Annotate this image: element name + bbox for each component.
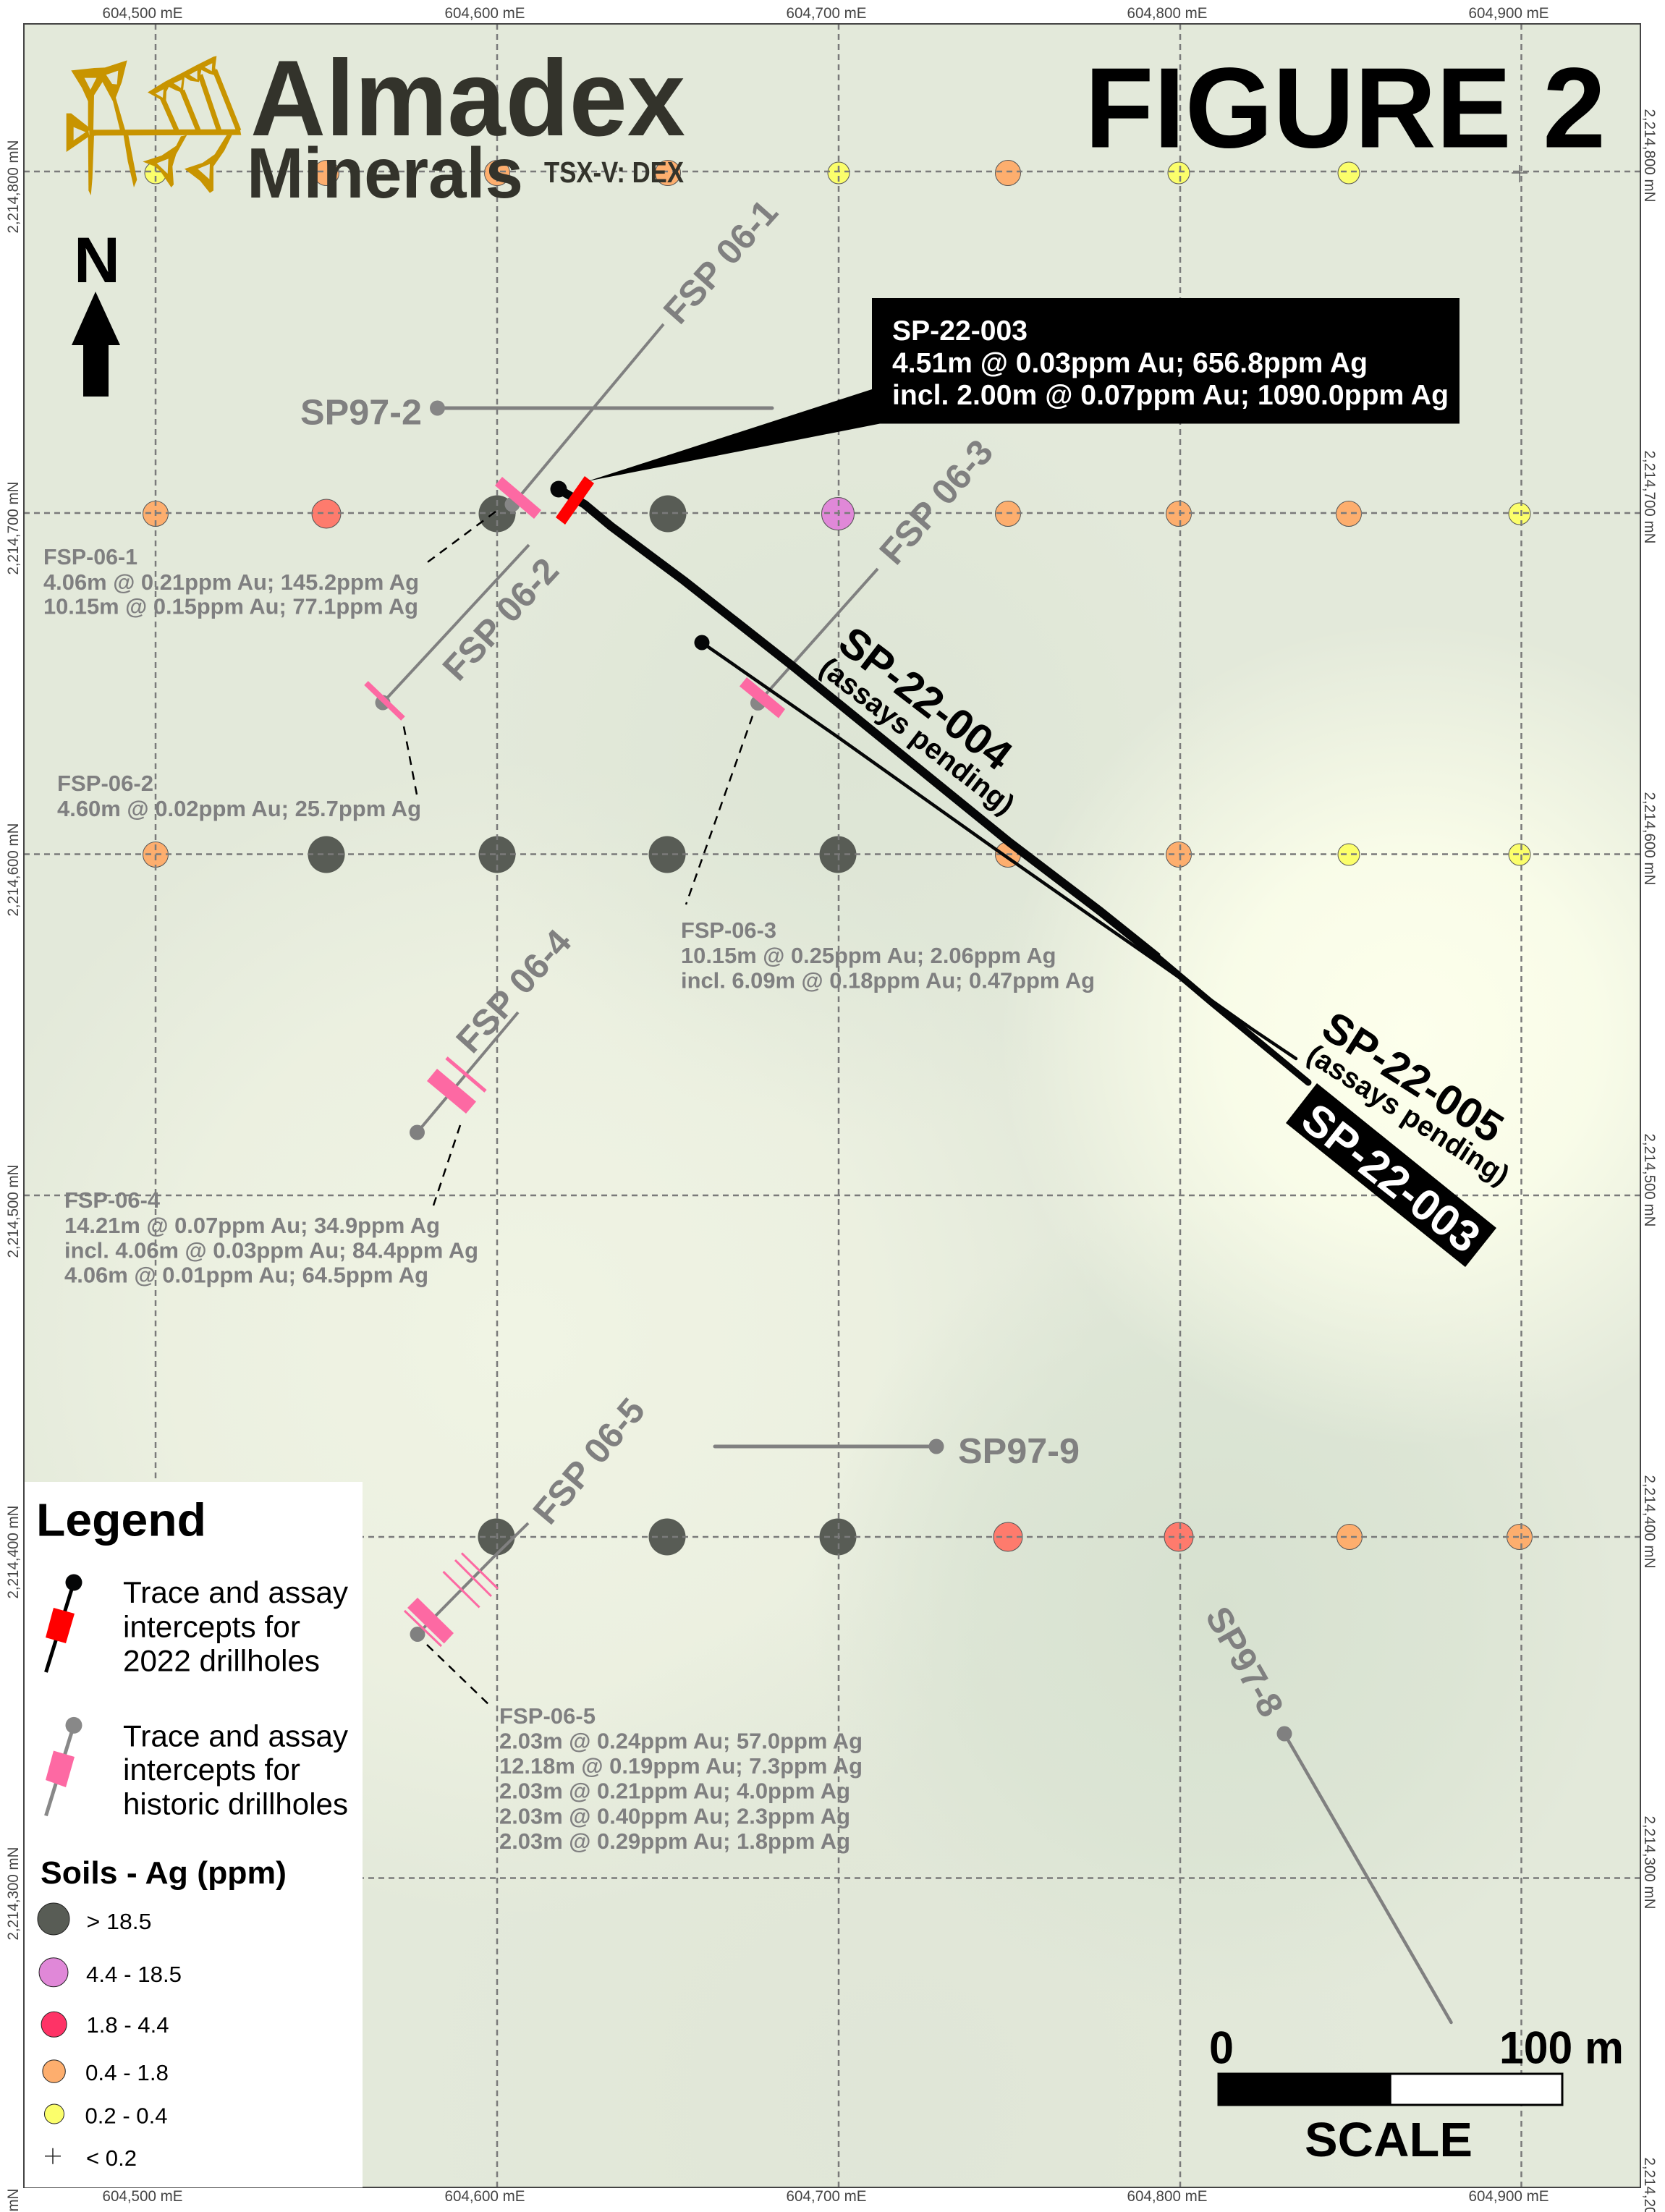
text: FSP-06-5 intercepts: 2.03m @ 0.29ppm Au; 1.8ppm Ag <box>499 1829 850 1854</box>
label: SP-22-004: SP-22-004 <box>830 617 1021 779</box>
logo wordmark: Minerals: Minerals <box>247 133 523 213</box>
legend item: greater than 18.5 <box>38 1903 152 1935</box>
text: FSP-06-5 intercepts: FSP-06-5 <box>499 1704 596 1729</box>
drillhole FSP 06-2 <box>366 545 529 794</box>
text: FSP-06-1 intercepts: 10.15m @ 0.15ppm Au; 77.1ppm Ag <box>43 595 418 619</box>
legend text: historic drillholes: Trace and assay <box>123 1719 348 1753</box>
callout: SP-22-003 assays <box>588 298 1459 481</box>
scale bar <box>1209 2023 1624 2167</box>
bottom axis labels: 604,800 mE <box>1127 2188 1207 2205</box>
legend icon: 2022 drillhole <box>46 1575 82 1672</box>
text: FSP-06-5 intercepts <box>499 1704 863 1854</box>
legend item: 0.2 to 0.4: 0.2 - 0.4 <box>85 2103 168 2129</box>
left axis labels <box>5 140 22 2212</box>
text: FSP-06-5 intercepts: 2.03m @ 0.40ppm Au; 2.3ppm Ag <box>499 1805 850 1829</box>
callout: SP-22-003 assays: 4.51m @ 0.03ppm Au; 656.8ppm Ag <box>892 347 1368 379</box>
legend item: 0.4 to 1.8: 0.4 - 1.8 <box>85 2060 169 2085</box>
text: FSP-06-3 intercepts: 10.15m @ 0.25ppm Au; 2.06ppm Ag <box>681 944 1056 968</box>
top axis labels <box>103 5 1549 22</box>
label: SP-22-003 on black box: SP-22-003 <box>1293 1093 1489 1262</box>
left axis labels: 2,214,800 mN <box>5 140 22 233</box>
left axis labels: 2,214,600 mN <box>5 823 22 916</box>
text: FSP-06-4 intercepts: FSP-06-4 <box>64 1188 160 1213</box>
drillhole FSP 06-5 <box>404 1523 528 1707</box>
drillhole SP-22-003 and SP-22-004 <box>550 476 1308 1082</box>
soil samples row 2,214,700 mN <box>143 495 1530 533</box>
legend item: greater than 18.5: > 18.5 <box>87 1909 152 1934</box>
text: FSP-06-4 intercepts: 14.21m @ 0.07ppm Au; 34.9ppm Ag <box>64 1213 440 1238</box>
label: FSP 06-1: FSP 06-1 <box>656 192 786 331</box>
legend item: less than 0.2: < 0.2 <box>86 2145 137 2171</box>
drillhole FSP 06-4 <box>410 1012 518 1205</box>
drillhole FSP 06-3 <box>686 569 878 904</box>
scale caption: SCALE <box>1305 2113 1473 2167</box>
left axis labels: 2,214,300 mN <box>5 1847 22 1941</box>
text: FSP-06-1 intercepts: FSP-06-1 <box>43 545 137 569</box>
legend item: less than 0.2 <box>45 2145 137 2171</box>
text: FSP-06-5 intercepts: 2.03m @ 0.24ppm Au; 57.0ppm Ag <box>499 1729 863 1754</box>
legend item: 4.4 to 18.5 <box>39 1958 182 1987</box>
legend text: historic drillholes: historic drillholes <box>123 1787 348 1821</box>
text: FSP-06-2 intercepts <box>57 771 421 821</box>
text: FSP-06-1 intercepts <box>43 545 419 619</box>
text: FSP-06-5 intercepts: 2.03m @ 0.21ppm Au; 4.0ppm Ag <box>499 1779 850 1804</box>
bottom axis labels: 604,600 mE <box>444 2188 525 2205</box>
text: FSP-06-3 intercepts <box>681 918 1095 993</box>
icon: Almadex cuneiform logo <box>67 56 241 195</box>
drillhole FSP 06-1 <box>423 324 664 566</box>
north label: N <box>74 224 120 296</box>
legend icon: historic drillhole <box>46 1717 82 1815</box>
legend text: 2022 drillholes: Trace and assay <box>123 1575 348 1609</box>
top axis labels: 604,500 mE <box>103 5 182 22</box>
drillhole SP97-2 <box>430 401 772 415</box>
panel: legend <box>25 1482 363 2187</box>
left axis labels: 2,214,700 mN <box>5 482 22 575</box>
legend text: 2022 drillholes: intercepts for <box>123 1610 300 1644</box>
text: FSP-06-3 intercepts: incl. 6.09m @ 0.18ppm Au; 0.47ppm Ag <box>681 969 1095 993</box>
soil samples row 2,214,800 mN <box>145 161 1528 185</box>
right axis labels: 2,214,400 mN <box>1641 1475 1658 1569</box>
legend text: 2022 drillholes <box>123 1575 348 1678</box>
text: FSP-06-4 intercepts <box>64 1188 478 1288</box>
right axis labels: 2,214,800 mN <box>1641 109 1658 203</box>
legend text: historic drillholes: intercepts for <box>123 1753 300 1787</box>
text: FSP-06-2 intercepts: FSP-06-2 <box>57 771 153 796</box>
scale label: 100 m: 100 m <box>1499 2023 1624 2074</box>
legend heading: Legend <box>36 1493 206 1546</box>
label: FSP 06-2: FSP 06-2 <box>435 551 567 688</box>
bottom axis labels: 604,500 mE <box>103 2188 182 2205</box>
label: SP97-8: SP97-8 <box>1198 1600 1291 1724</box>
icon: north arrow <box>72 292 120 397</box>
legend text: historic drillholes <box>123 1719 348 1821</box>
top axis labels: 604,700 mE <box>786 5 867 22</box>
callout: SP-22-003 assays: incl. 2.00m @ 0.07ppm Au; 1090.0ppm Ag <box>892 380 1449 411</box>
logo wordmark: Almadex: Almadex <box>250 38 685 158</box>
label: FSP 06-4: FSP 06-4 <box>449 922 580 1061</box>
top axis labels: 604,900 mE <box>1469 5 1549 22</box>
right axis labels: 2,214,300 mN <box>1641 1816 1658 1909</box>
legend text: 2022 drillholes: 2022 drillholes <box>123 1644 320 1678</box>
top axis labels: 604,600 mE <box>444 5 525 22</box>
text: FSP-06-1 intercepts: 4.06m @ 0.21ppm Au; 145.2ppm Ag <box>43 570 419 595</box>
soil samples row 2,214,400 mN <box>478 1518 1533 1556</box>
bottom axis labels: 604,900 mE <box>1469 2188 1549 2205</box>
bottom axis labels <box>103 2188 1549 2205</box>
title: FIGURE 2: FIGURE 2 <box>1085 45 1606 172</box>
text: FSP-06-4 intercepts: 4.06m @ 0.01ppm Au; 64.5ppm Ag <box>64 1263 428 1288</box>
text: FSP-06-4 intercepts: incl. 4.06m @ 0.03ppm Au; 84.4ppm Ag <box>64 1239 478 1263</box>
text: FSP-06-5 intercepts: 12.18m @ 0.19ppm Au; 7.3ppm Ag <box>499 1754 863 1779</box>
right axis labels: 2,214,500 mN <box>1641 1133 1658 1227</box>
label: SP97-2: SP97-2 <box>300 392 422 433</box>
label: SP-22-005 assays pending: (assays pending) <box>1302 1038 1515 1192</box>
label: SP-22-005: SP-22-005 <box>1314 1002 1512 1152</box>
text: FSP-06-2 intercepts: 4.60m @ 0.02ppm Au; 25.7ppm Ag <box>57 797 421 821</box>
legend item: 4.4 to 18.5: 4.4 - 18.5 <box>86 1962 182 1987</box>
right axis labels: 2,214,600 mN <box>1641 792 1658 886</box>
label: FSP 06-3: FSP 06-3 <box>872 432 1001 572</box>
drillhole SP97-8 <box>1276 1726 1452 2022</box>
drillhole SP-22-005 <box>695 635 1296 1059</box>
legend item: 0.4 to 1.8 <box>43 2060 169 2085</box>
label: FSP 06-5: FSP 06-5 <box>525 1391 653 1532</box>
drillhole SP97-9 <box>715 1438 944 1454</box>
legend item: 0.2 to 0.4 <box>45 2103 168 2129</box>
soil samples row 2,214,600 mN <box>143 836 1530 873</box>
scale bar segments <box>1219 2074 1562 2105</box>
left axis labels: 2,214,500 mN <box>5 1165 22 1258</box>
callout: SP-22-003 assays: SP-22-003 <box>892 315 1028 347</box>
ticker text: TSX-V: DEX <box>544 156 684 189</box>
text: FSP-06-3 intercepts: FSP-06-3 <box>681 918 776 943</box>
label: SP-22-004 assays pending: (assays pending) <box>813 651 1020 821</box>
legend item: 1.8 to 4.4: 1.8 - 4.4 <box>87 2012 169 2038</box>
bottom axis labels: 604,700 mE <box>786 2188 867 2205</box>
left axis labels: 2,214,400 mN <box>5 1505 22 1599</box>
scale label: 0: 0 <box>1209 2023 1234 2074</box>
right axis labels <box>1641 109 1658 2212</box>
right axis labels: 2,214,700 mN <box>1641 450 1658 544</box>
legend subheading: soils: Soils - Ag (ppm) <box>41 1855 287 1891</box>
legend item: 1.8 to 4.4 <box>41 2012 169 2038</box>
label: SP97-9: SP97-9 <box>958 1431 1080 1471</box>
top axis labels: 604,800 mE <box>1127 5 1207 22</box>
